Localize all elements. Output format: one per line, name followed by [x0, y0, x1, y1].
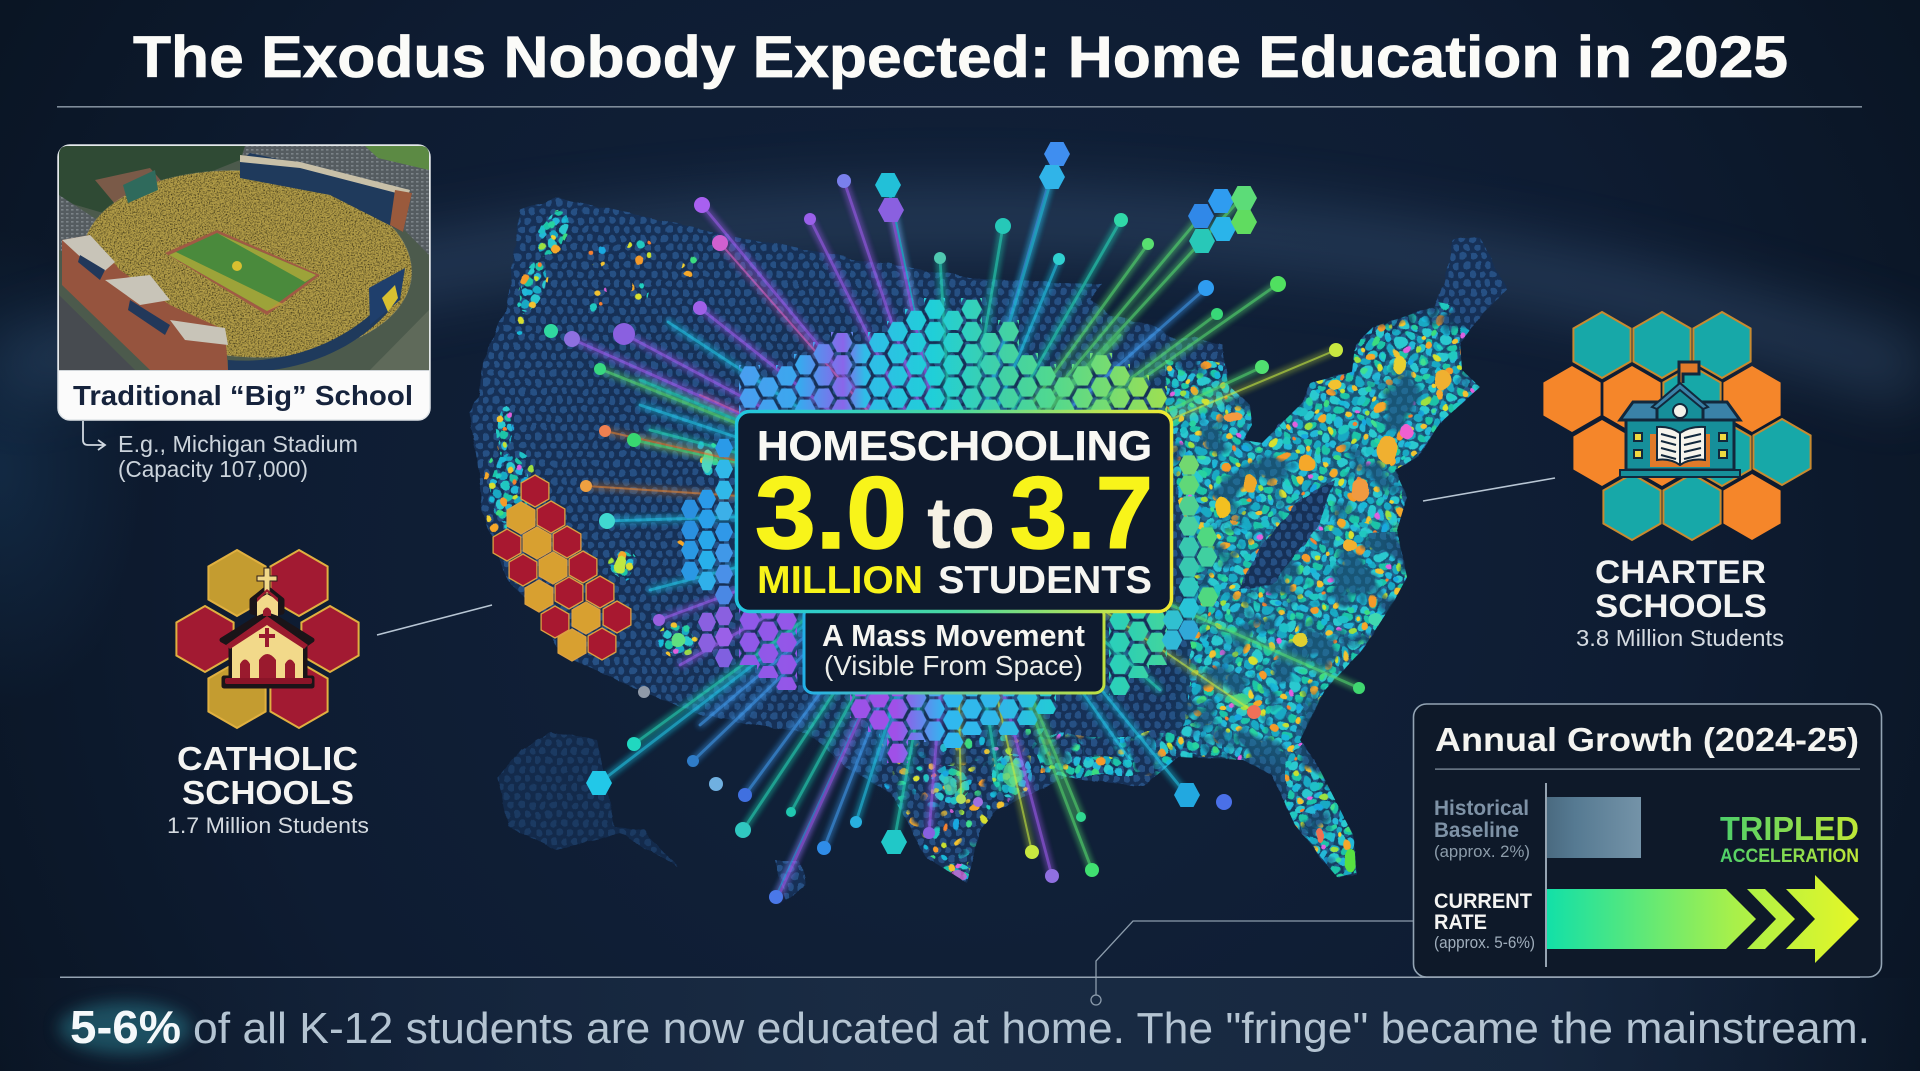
map: eastern speckle density — [880, 300, 1490, 880]
chart axis — [1545, 783, 1547, 967]
stat: catholic enrollment: 1.7 Million Students — [167, 813, 369, 838]
callout: tripled acceleration: ACCELERATION — [1720, 846, 1859, 867]
callout: homeschooling headline box: 3.0 — [755, 456, 907, 570]
map: Appalachian dark gaps — [1238, 480, 1335, 590]
panel: traditional big school — [58, 145, 430, 482]
callout: tripled acceleration — [1720, 810, 1859, 867]
map: United States hex-dot base — [460, 190, 1520, 910]
note: stadium capacity — [118, 431, 358, 482]
left hex column — [681, 439, 733, 667]
label: historical baseline: (approx. 2%) — [1434, 842, 1530, 861]
sub box: a mass movement: (Visible From Space) — [824, 650, 1083, 681]
label: current rate: CURRENT — [1434, 890, 1532, 913]
heading rule — [1435, 768, 1860, 770]
heading: annual growth: Annual Growth (2024-25) — [1435, 721, 1859, 758]
callout: homeschooling headline box — [736, 412, 1172, 693]
callout: homeschooling headline box: MILLION — [757, 559, 923, 602]
California red and gold hex cluster — [493, 475, 631, 661]
icon: catholic hex cluster with church — [176, 550, 359, 728]
label: traditional big school: Traditional “Big” School — [73, 380, 413, 411]
label: current rate — [1434, 890, 1535, 952]
panel: catholic schools — [167, 550, 369, 838]
callout: homeschooling headline box: STUDENTS — [938, 559, 1152, 602]
label: catholic schools: CATHOLIC — [177, 740, 358, 777]
central hex burst — [681, 298, 1218, 763]
title divider — [57, 106, 1862, 108]
footer takeaway: 5-6% — [70, 1001, 181, 1053]
sub box: a mass movement — [804, 606, 1104, 693]
sub box: a mass movement: A Mass Movement — [822, 618, 1085, 653]
connector: catholic to california — [377, 605, 492, 635]
arrow: elbow pointer — [83, 421, 105, 450]
stat: charter enrollment: 3.8 Million Students — [1576, 625, 1784, 651]
callout: tripled acceleration: TRIPLED — [1720, 810, 1859, 847]
note: stadium capacity: (Capacity 107,000) — [118, 456, 308, 482]
title: The Exodus Nobody Expected: Home Education in 2025 — [133, 25, 1788, 90]
label: current rate: (approx. 5-6%) — [1434, 933, 1535, 952]
connector: charter to east coast — [1423, 478, 1555, 501]
note: stadium capacity: E.g., Michigan Stadium — [118, 431, 358, 457]
label: current rate: RATE — [1434, 911, 1487, 934]
label: schools line: SCHOOLS — [182, 774, 354, 811]
radiating rays — [572, 154, 1359, 897]
callout: homeschooling headline box: 3.7 — [1010, 456, 1153, 570]
right hex column — [1162, 455, 1218, 650]
map: bright metro clusters — [484, 204, 1451, 880]
ray end nodes — [544, 142, 1365, 904]
bar: historical baseline — [1547, 797, 1641, 858]
arrow: current rate bar with chevrons — [1547, 875, 1859, 963]
label: schools: SCHOOLS — [1595, 588, 1767, 624]
connector: growth panel to footer — [1091, 921, 1413, 1005]
label: historical baseline — [1434, 797, 1530, 861]
callout: homeschooling headline box: to — [927, 484, 995, 564]
label: historical baseline: Baseline — [1434, 819, 1519, 842]
label: historical baseline: Historical — [1434, 797, 1529, 820]
icon: charter hex cluster with schoolhouse — [1543, 312, 1811, 540]
label: charter: CHARTER — [1595, 554, 1766, 590]
callout: homeschooling headline box: HOMESCHOOLING — [757, 422, 1152, 469]
footer rule — [60, 976, 1860, 978]
panel: annual growth — [1414, 704, 1882, 977]
footer takeaway: of all K-12 students are now educated at home. The "fringe" became the mainstream. — [193, 1004, 1870, 1053]
panel: charter schools — [1543, 312, 1811, 651]
card: stadium photo — [58, 145, 430, 420]
